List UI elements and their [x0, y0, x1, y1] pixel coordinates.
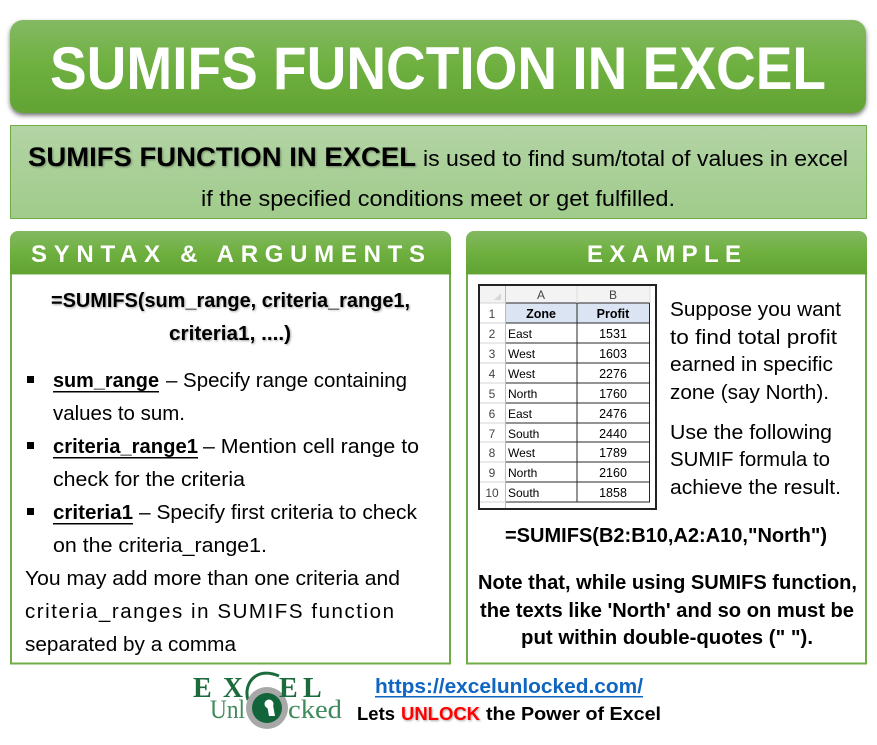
row numbers: 4 [489, 367, 496, 381]
bullet: criteria1 [27, 501, 418, 557]
zone column: North [508, 387, 537, 401]
syntax formula [51, 290, 410, 345]
zone column: West [508, 367, 536, 381]
bullet: sum_range: – Specify range containing [166, 369, 407, 392]
closing note: separated by a comma [25, 633, 237, 656]
row numbers: 1 [489, 307, 496, 321]
example header: EXAMPLE [587, 241, 741, 268]
example explanation: achieve the result. [670, 476, 841, 499]
syntax header [10, 231, 451, 274]
footer logo: X [223, 673, 243, 704]
footer tagline: Lets [357, 704, 395, 724]
title: SUMIFS FUNCTION IN EXCEL [50, 35, 826, 102]
profit column: 2276 [599, 367, 627, 381]
profit column: 2440 [599, 427, 627, 441]
bullet: criteria_range1: check for the criteria [53, 468, 246, 491]
bullet: sum_range: sum_range [53, 369, 159, 392]
column headers [537, 288, 617, 302]
panel: definition [10, 126, 866, 218]
title banner [10, 20, 866, 113]
bullet: criteria1: – Specify first criteria to check [139, 501, 418, 524]
example explanation: SUMIF formula to [670, 448, 830, 471]
bullet: criteria1: on the criteria_range1. [53, 534, 267, 557]
zone column: East [508, 407, 533, 421]
footer logo: cked [288, 695, 342, 724]
example explanation: Suppose you want [670, 298, 841, 321]
footer tagline [357, 704, 661, 724]
closing note: criteria_ranges in SUMIFS function [25, 600, 394, 623]
profit column [597, 307, 630, 500]
panel: example [466, 231, 867, 664]
column headers: A [537, 288, 545, 302]
footer logo: E [193, 673, 212, 704]
row numbers: 5 [489, 387, 496, 401]
footer logo: E [279, 673, 298, 704]
profit column: 1531 [599, 327, 627, 341]
syntax header: SYNTAX & ARGUMENTS [31, 241, 425, 268]
row numbers: 6 [489, 407, 496, 421]
column headers: B [609, 288, 617, 302]
example explanation: Use the following [670, 421, 832, 444]
example explanation: zone (say North). [670, 381, 829, 404]
definition line one: is used to find sum/total of values in excel [423, 146, 848, 171]
bullet: criteria_range1: – Mention cell range to [203, 435, 419, 458]
row numbers: 8 [489, 446, 496, 460]
example formula: =SUMIFS(B2:B10,A2:A10,"North") [505, 525, 827, 547]
row numbers: 7 [489, 427, 496, 441]
zone column: North [508, 466, 537, 480]
example header [466, 231, 867, 274]
footer tagline: UNLOCK [401, 704, 480, 724]
row numbers: 3 [489, 347, 496, 361]
footer logo: Unl [210, 695, 245, 724]
example note: the texts like 'North' and so on must be [480, 600, 854, 622]
example explanation: to find total profit [670, 326, 837, 349]
zone column: South [508, 427, 539, 441]
footer logo: L [303, 673, 322, 704]
footer tagline: the Power of Excel [486, 704, 661, 724]
zone column: South [508, 486, 539, 500]
profit column: 2160 [599, 466, 627, 480]
footer logo [193, 673, 342, 729]
bullet: sum_range: values to sum. [53, 402, 185, 425]
example note: Note that, while using SUMIFS function, [478, 572, 857, 594]
bullet: criteria_range1: criteria_range1 [53, 435, 198, 458]
profit column: Profit [597, 307, 630, 321]
example explanation [670, 298, 841, 499]
zone column: Zone [526, 307, 556, 321]
profit column: 1789 [599, 446, 627, 460]
bullet: criteria_range1 [27, 435, 419, 491]
profit column: 2476 [599, 407, 627, 421]
bullet: criteria1: criteria1 [53, 501, 133, 524]
row numbers: 2 [489, 327, 496, 341]
closing note [25, 567, 400, 656]
zone column [508, 307, 556, 500]
footer link: https://excelunlocked.com/ [375, 676, 643, 698]
example note: put within double-quotes (" "). [521, 627, 813, 649]
definition line two: if the specified conditions meet or get fulfilled. [201, 186, 675, 211]
syntax formula: =SUMIFS(sum_range, criteria_range1, [51, 290, 410, 312]
row numbers [485, 307, 499, 500]
bullet: sum_range [27, 369, 407, 425]
profit column: 1858 [599, 486, 627, 500]
panel: syntax and arguments [10, 231, 451, 664]
row numbers: 10 [485, 486, 499, 500]
profit column: 1760 [599, 387, 627, 401]
profit column: 1603 [599, 347, 627, 361]
syntax formula: criteria1, ....) [169, 323, 291, 345]
zone column: West [508, 347, 536, 361]
example explanation: earned in specific [670, 353, 833, 376]
zone column: East [508, 327, 533, 341]
row numbers: 9 [489, 466, 496, 480]
example note [478, 572, 857, 649]
excel data table [479, 285, 656, 509]
zone column: West [508, 446, 536, 460]
closing note: You may add more than one criteria and [25, 567, 400, 590]
definition heading: SUMIFS FUNCTION IN EXCEL [28, 142, 416, 172]
